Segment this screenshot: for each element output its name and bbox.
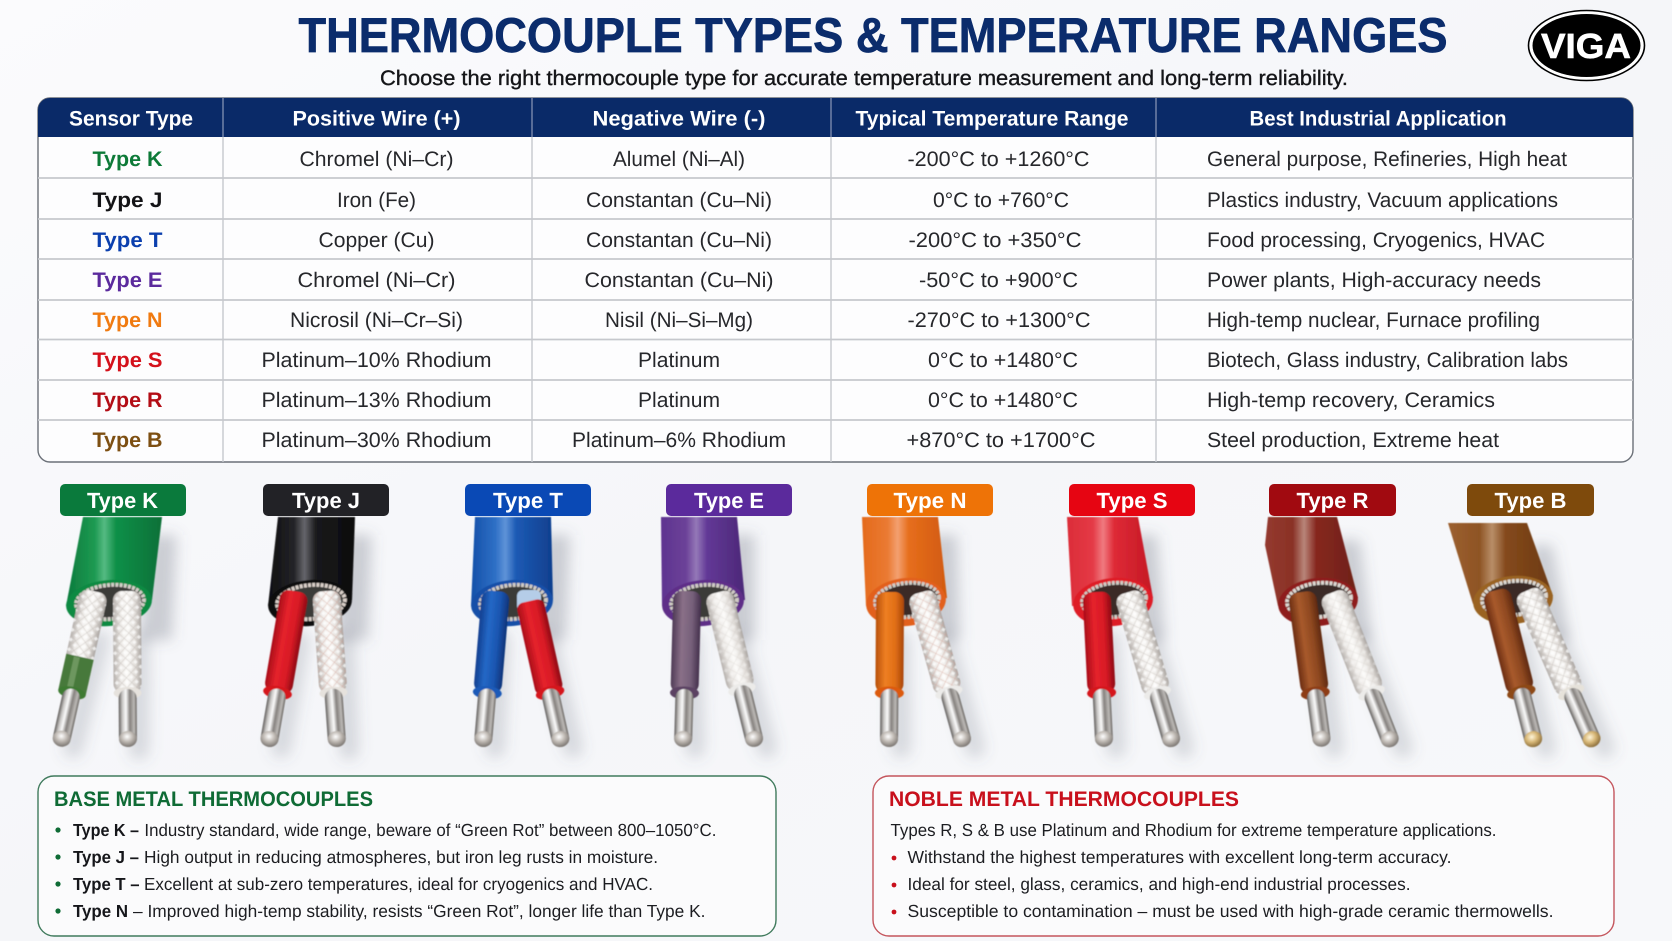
row: Type N: -270°C to +1300°C: [908, 309, 1090, 332]
row: Type B: Platinum–6% Rhodium: [572, 429, 786, 452]
row: Type B: Platinum–30% Rhodium: [262, 429, 492, 452]
row: Type J: [92, 189, 1558, 212]
row: Type B: Steel production, Extreme heat: [1207, 429, 1499, 452]
row: Type R: Platinum–13% Rhodium: [262, 389, 492, 412]
badge: Type K: [60, 484, 186, 516]
row: Type N: High-temp nuclear, Furnace profiling: [1207, 309, 1540, 332]
table header row: Positive Wire (+): [292, 108, 460, 130]
row: Type K: [92, 148, 1567, 171]
list item: Type K: Type K –: [73, 820, 139, 840]
badge: Type B: Type B: [1494, 488, 1566, 513]
list item: Type J: High output in reducing atmospheres, but iron leg rusts in moisture.: [144, 847, 658, 867]
row: Type J: Iron (Fe): [337, 189, 416, 212]
badge: Type N: Type N: [894, 488, 966, 513]
badge: Type S: Type S: [1096, 488, 1168, 513]
table header row: Best Industrial Application: [1250, 108, 1506, 130]
row: Type S: Type S: [92, 349, 162, 372]
list item: Type T: Type T –: [73, 874, 140, 894]
cable: Type E: [660, 484, 792, 750]
row: Type B: [92, 429, 1499, 452]
badge: Type E: Type E: [694, 488, 764, 513]
row: Type T: Type T: [92, 229, 163, 252]
row: Type E: Type E: [92, 269, 162, 292]
row: Type N: Nicrosil (Ni–Cr–Si): [290, 309, 463, 332]
badge: Type T: Type T: [493, 488, 564, 513]
row: Type R: Type R: [92, 389, 162, 412]
badge: Type S: [1069, 484, 1195, 516]
row: Type T: [92, 229, 1545, 252]
row: Type J: Plastics industry, Vacuum applications: [1207, 189, 1558, 212]
row: Type K: Type K: [92, 148, 162, 171]
title: THERMOCOUPLE TYPES & TEMPERATURE RANGES: [298, 9, 1448, 63]
row: Type S: [92, 349, 1568, 372]
list item: Type N: Type N: [73, 901, 128, 921]
cable: Type T: [465, 484, 591, 750]
row: Type S: Biotech, Glass industry, Calibration labs: [1207, 349, 1568, 372]
subtitle: Choose the right thermocouple type for accurate temperature measurement and long-term reliability.: [380, 67, 1348, 90]
row: Type J: Constantan (Cu–Ni): [586, 189, 772, 212]
table header row: Sensor Type: [69, 108, 193, 130]
heading: noble metal: NOBLE METAL THERMOCOUPLES: [889, 788, 1239, 811]
row: Type J: 0°C to +760°C: [933, 189, 1069, 212]
list item: accuracy: Withstand the highest temperatures with excellent long-term accuracy.: [908, 847, 1452, 867]
row: Type E: Constantan (Cu–Ni): [584, 269, 774, 292]
badge: Type K: Type K: [87, 488, 158, 513]
badge: Type B: [1467, 484, 1594, 516]
row: Type R: Platinum: [638, 389, 720, 412]
row: Type B: +870°C to +1700°C: [906, 429, 1096, 452]
intro text: Types R, S & B use Platinum and Rhodium for extreme temperature applications.: [890, 820, 1496, 840]
cable: Type K: [46, 484, 186, 750]
table header row: Typical Temperature Range: [856, 108, 1128, 130]
badge: Type T: [465, 484, 591, 516]
row: Type N: [92, 309, 1540, 332]
logo: VIGA: VIGA: [1541, 27, 1631, 66]
row: Type E: Chromel (Ni–Cr): [298, 269, 456, 292]
row: Type R: 0°C to +1480°C: [928, 389, 1078, 412]
row: Type T: Copper (Cu): [318, 229, 434, 252]
cable: Type J: [254, 484, 389, 750]
row: Type S: Platinum: [638, 349, 720, 372]
row: Type E: Power plants, High-accuracy needs: [1207, 269, 1541, 292]
row: Type K: Chromel (Ni–Cr): [300, 148, 454, 171]
table header row: Negative Wire (-): [592, 108, 766, 130]
list item: Type J: Type J –: [73, 847, 139, 867]
cable: Type B: [1448, 484, 1608, 752]
cable: Type R: [1265, 484, 1406, 752]
heading: base metal: BASE METAL THERMOCOUPLES: [54, 788, 373, 811]
row: Type E: [92, 269, 1541, 292]
table: thermocouple types: [38, 98, 1633, 462]
row: Type R: High-temp recovery, Ceramics: [1207, 389, 1495, 412]
badge: Type R: Type R: [1296, 488, 1369, 513]
row: Type S: 0°C to +1480°C: [928, 349, 1078, 372]
cable: Type S: [1067, 484, 1195, 751]
badge: Type J: Type J: [292, 488, 360, 513]
logo: VIGA: [1528, 10, 1644, 80]
row: Type E: -50°C to +900°C: [919, 269, 1078, 292]
row: Type R: [92, 389, 1495, 412]
badge: Type R: [1269, 484, 1396, 516]
row: Type K: Alumel (Ni–Al): [613, 148, 745, 171]
panel: noble metal thermocouples: [873, 776, 1614, 936]
badge: Type E: [666, 484, 792, 516]
list item: Type N: – Improved high-temp stability, resists “Green Rot”, longer life than Type K.: [133, 901, 706, 921]
row: Type T: Constantan (Cu–Ni): [586, 229, 772, 252]
row: Type N: Nisil (Ni–Si–Mg): [605, 309, 753, 332]
row: Type B: Type B: [92, 429, 162, 452]
row: Type S: Platinum–10% Rhodium: [262, 349, 492, 372]
row: Type T: Food processing, Cryogenics, HVAC: [1207, 229, 1545, 252]
list item: Type K: Industry standard, wide range, beware of “Green Rot” between 800–1050°C.: [144, 820, 716, 840]
list item: industries: Ideal for steel, glass, ceramics, and high-end industrial processes.: [908, 874, 1410, 894]
cable: Type N: [862, 484, 993, 751]
badge: Type J: [263, 484, 389, 516]
list item: Type T: Excellent at sub-zero temperatures, ideal for cryogenics and HVAC.: [144, 874, 653, 894]
list item: contamination: Susceptible to contamination – must be used with high-grade ceramic thermowells.: [908, 901, 1554, 921]
row: Type K: General purpose, Refineries, High heat: [1207, 148, 1567, 171]
panel: base metal thermocouples: [38, 776, 776, 936]
row: Type K: -200°C to +1260°C: [908, 148, 1090, 171]
badge: Type N: [867, 484, 993, 516]
row: Type T: -200°C to +350°C: [908, 229, 1082, 252]
row: Type N: Type N: [92, 309, 162, 332]
table header row: [69, 108, 1506, 130]
row: Type J: Type J: [92, 189, 162, 212]
